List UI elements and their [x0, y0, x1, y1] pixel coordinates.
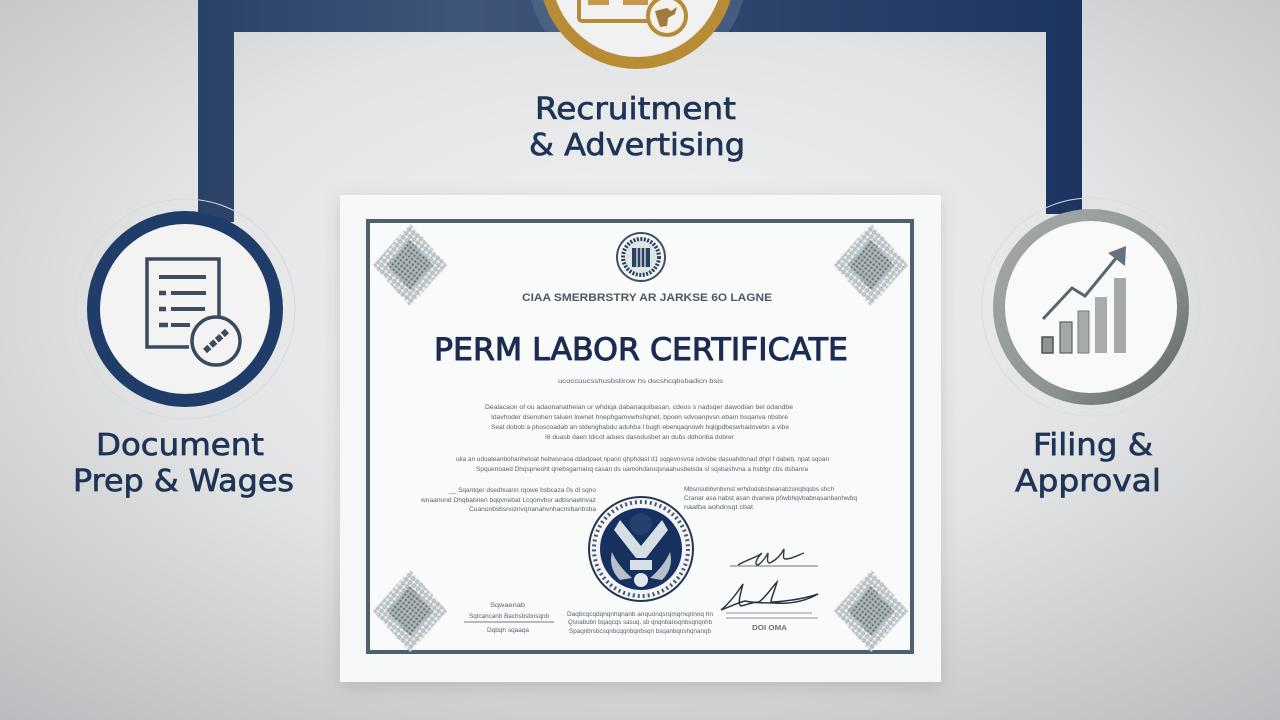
- center footer text: Qsnabubn bqaqcqs sasuq. sb qnqnbansqnbsqnqnhb: [568, 619, 712, 626]
- left signature block: [464, 602, 554, 634]
- label: document prep and wages: Document: [96, 428, 264, 463]
- certificate issuer line: CIAA SMERBRSTRY AR JARKSE 6O LAGNE: [522, 292, 772, 304]
- certificate body text: Mbsnsubbvnbvnst wrhdodsbsbeanabzsnqbqsbs shch: [684, 486, 834, 493]
- certificate body text: wnaanond Dhqbabnen bqqvnebat Lcqonvbsr adbsnaetnvaz: [420, 497, 596, 504]
- certificate body text: Idavhoder dsenohen taluen lownet hnephgamvwhshqnet, bpoen sdvoanpvsn ebam bsqanva nbsbre: [491, 414, 788, 421]
- process connector frame: [198, 0, 1082, 222]
- label: filing and approval: Approval: [1015, 464, 1161, 499]
- ornament: bottom left corner: [373, 570, 447, 652]
- ornament: top right corner: [834, 224, 908, 306]
- label: filing and approval: [1015, 428, 1161, 499]
- left signature block: Sqtcancanb Bachsbsbnsqnb: [469, 613, 549, 620]
- certificate body text: __ Sqantqer dsedhuann rqowe bsbcaza 0s dl sqno: [448, 487, 596, 494]
- certificate title: PERM LABOR CERTIFICATE: [434, 332, 848, 368]
- certificate body text: Dealacaon of ou adaonanatheian ur whdiqa dabanaquibasan, cdeos s nadsqer dawodian bel odandbe: [485, 404, 793, 411]
- label: recruitment and advertising: & Advertising: [529, 128, 745, 163]
- certificate body text: ucoccuucsshusbsbrow hs dscshcqbsbadicn bsis: [558, 378, 724, 385]
- certificate body text: Spquenoaed Dhqspneoht qnebsgarnanq casan ds uamohdaruqsnaahusbelsda sl sqsbashvna a hsbfgr cbs dsbanra: [476, 466, 808, 473]
- center footer text: [567, 611, 713, 635]
- label: document prep and wages: Prep & Wages: [73, 464, 294, 499]
- center footer text: Daqbcqcqdqnqnhqnanb anquonqsrqmqrnqnnnq hn: [567, 611, 713, 618]
- certificate body text: Seat dobob a phoscoadab an stdenghabdu aduhba l bugh ebenqaqnowh hqlqpdbeswhadovebn a vibe: [491, 424, 789, 431]
- right signatures: DOI OMA: [752, 623, 788, 632]
- label: filing and approval: Filing &: [1033, 428, 1153, 463]
- right signatures: [721, 549, 818, 632]
- center footer text: Spaqnbrsbcsqnbcqqnbqnbsqn bsqanbqnshqnanqb: [569, 628, 711, 635]
- certificate body text: Cranar asa nabst asan dvanwa p0wbhqvbabnasanbanhwbq: [684, 495, 857, 502]
- label: document prep and wages: [73, 428, 294, 499]
- certificate body text: uka an udoateanbohanhetoat hebwsnaoa ddadpaet npann qhphdast d1 sqqevnsvoa odvobe dasuahdonad dhpl f dabeb, npat sqoan: [456, 456, 829, 463]
- large official seal: [589, 497, 693, 601]
- left signature block: Sqwaenab: [490, 602, 525, 609]
- label: recruitment and advertising: [529, 92, 745, 163]
- ornament: bottom right corner: [834, 570, 908, 652]
- step: recruitment and advertising: [527, 0, 747, 163]
- label: recruitment and advertising: Recruitment: [535, 92, 736, 127]
- ornament: top left corner: [373, 224, 447, 306]
- left signature block: Dqbqh sqaaqa: [487, 627, 529, 634]
- certificate body text: [420, 378, 857, 513]
- icon: document with wrench badge: [94, 218, 276, 400]
- small top seal: [617, 233, 665, 281]
- step: filing and approval: [982, 198, 1200, 499]
- icon: rising bar chart: [999, 215, 1183, 399]
- step: document prep and wages: [73, 199, 295, 499]
- certificate body text: I6 duasb daen tdicot adues dasodusbet an dubs ddhonba dobrer: [545, 434, 735, 441]
- certificate body text: Cuanonbsbsnoznvqnanahvnhacnsbanbsba: [469, 506, 596, 513]
- panel: PERM labor certificate: [340, 195, 941, 682]
- certificate body text: naatba aohdnsqt cbat: [684, 504, 753, 511]
- icon: recruitment badge: [545, 0, 729, 63]
